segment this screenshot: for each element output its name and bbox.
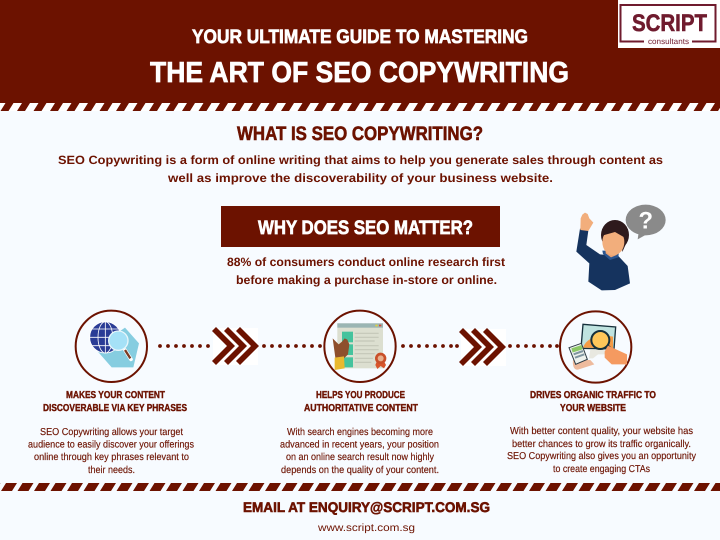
intro paragraph	[58, 153, 663, 185]
column 3: heading: YOUR WEBSITE	[560, 403, 626, 414]
column 2: heading: HELPS YOU PRODUCE	[316, 390, 405, 401]
column 1: body text: SEO Copywriting allows your target	[40, 427, 183, 438]
column 1: heading: MAKES YOUR CONTENT	[66, 390, 165, 401]
column 2: body text: advanced in recent years, your position	[280, 440, 439, 450]
column 2: heading: AUTHORITATIVE CONTENT	[304, 403, 418, 414]
logo: Script Consultants: SCRIPT	[632, 10, 707, 37]
column 3: body text: better chances to grow its traffic organically.	[512, 439, 691, 450]
banner: why does SEO matter: WHY DOES SEO MATTER?	[258, 217, 473, 239]
column 1: body text: online through key phrases relevant to	[34, 452, 189, 463]
icon: monitor and phone with magnifier	[560, 311, 631, 383]
column 3: body text: to create engaging CTAs	[553, 464, 650, 475]
column 3: body text: SEO Copywriting also gives you an opportunity	[507, 451, 696, 462]
intro paragraph: SEO Copywriting is a form of online writing that aims to help you generate sales through content as	[58, 153, 663, 167]
column 2: body text: depends on the quality of your content.	[281, 465, 439, 476]
header banner	[0, 0, 720, 111]
column 3: heading	[530, 390, 656, 414]
main title: THE ART OF SEO COPYWRITING	[150, 57, 569, 89]
statistic text: 88% of consumers conduct online research first	[227, 255, 505, 269]
header subtitle: YOUR ULTIMATE GUIDE TO MASTERING	[192, 26, 528, 48]
logo: Script Consultants	[618, 0, 720, 48]
footer website: www.script.com.sg	[317, 522, 415, 534]
column 1: heading: DISCOVERABLE VIA KEY PHRASES	[43, 403, 187, 414]
column 1: body text: audience to easily discover your offerings	[28, 440, 194, 450]
icon: person with question bubble: ?	[638, 207, 653, 234]
column 1: heading	[43, 390, 187, 414]
column 2: body text: on an online search result now highly	[286, 452, 434, 463]
statistic text: before making a purchase in-store or online.	[236, 273, 497, 287]
icon: person with question bubble	[576, 205, 666, 290]
connector: dots and chevrons one	[158, 327, 322, 365]
column 3: heading: DRIVES ORGANIC TRAFFIC TO	[530, 390, 656, 401]
icon: globe and magnifier	[76, 311, 147, 382]
heading: what is SEO copywriting: WHAT IS SEO COPYWRITING?	[237, 123, 483, 145]
banner: why does SEO matter	[221, 206, 500, 247]
intro paragraph: well as improve the discoverability of your business website.	[167, 171, 553, 185]
icon: document with thumbs up	[324, 311, 396, 382]
column 3: body text	[507, 426, 696, 475]
column 1: body text: their needs.	[88, 465, 135, 476]
logo: Script Consultants: consultants	[648, 37, 689, 46]
footer stripe divider	[0, 483, 720, 491]
column 2: body text: With search engines becoming more	[287, 427, 433, 438]
connector: dots and chevrons two	[401, 328, 559, 366]
footer email: EMAIL AT ENQUIRY@SCRIPT.COM.SG	[243, 499, 490, 515]
column 1: body text	[28, 427, 194, 476]
column 3: body text: With better content quality, your website has	[510, 426, 693, 437]
column 2: heading	[304, 390, 418, 414]
column 2: body text	[280, 427, 439, 476]
statistic text	[227, 255, 505, 287]
